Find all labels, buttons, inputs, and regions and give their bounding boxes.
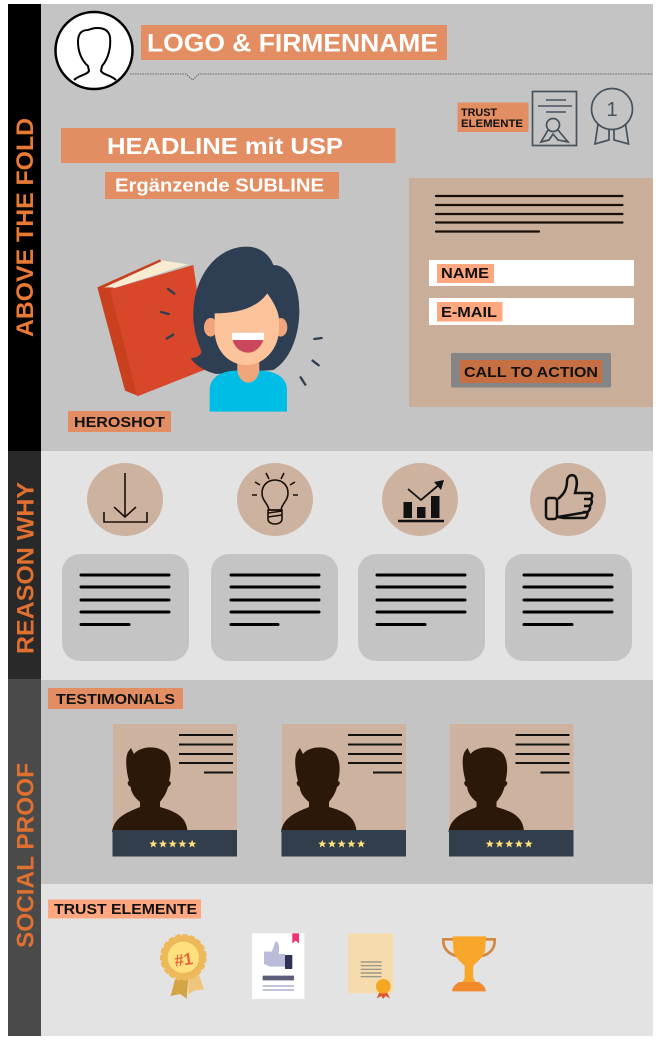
testimonial card two xyxy=(281,724,406,856)
icon: medal number one xyxy=(592,88,632,144)
panel: testimonials xyxy=(41,680,653,884)
face xyxy=(215,293,279,365)
book pages xyxy=(100,260,188,289)
neck xyxy=(237,360,259,383)
testimonial card one xyxy=(112,724,237,856)
panel: above the fold xyxy=(8,4,653,451)
input: name xyxy=(429,260,634,286)
icon: rosette number one xyxy=(161,935,205,999)
button: call to action: CALL TO ACTION xyxy=(464,364,598,381)
icon: trophy xyxy=(443,936,495,991)
sidebar: social proof: SOCIAL PROOF xyxy=(12,763,40,948)
button: call to action xyxy=(451,353,611,388)
card: reason four xyxy=(505,554,632,661)
label: heroshot xyxy=(68,411,171,432)
icon: medal number one: 1 xyxy=(606,99,618,121)
testimonial card three xyxy=(448,724,574,856)
sidebar: social proof xyxy=(8,679,41,1036)
form text lines xyxy=(436,196,622,232)
dotted header divider xyxy=(130,74,653,80)
label: trust elements: ELEMENTE xyxy=(461,118,523,130)
input: name: NAME xyxy=(441,265,489,282)
label: logo and company name: LOGO & FIRMENNAME xyxy=(147,30,438,58)
icon: growth chart xyxy=(382,463,458,536)
label: trust elements: TRUST xyxy=(461,107,497,119)
icon: thumbs up xyxy=(530,463,606,536)
sidebar: above the fold xyxy=(8,4,41,451)
label: trust elements xyxy=(458,102,528,132)
panel: lead form xyxy=(409,178,653,407)
input: e-mail: E-MAIL xyxy=(441,304,497,321)
subline xyxy=(105,172,339,199)
voice marks xyxy=(301,338,322,385)
sidebar: reason why xyxy=(8,451,41,679)
shirt xyxy=(210,371,287,412)
card: reason two xyxy=(211,554,338,661)
heroshot illustration: woman with book xyxy=(97,247,322,412)
label: testimonials xyxy=(48,688,183,709)
icon: rosette number one: #1 xyxy=(173,949,194,970)
headline xyxy=(61,128,396,163)
icon: certificate with seal xyxy=(348,933,393,999)
subline: Ergänzende SUBLINE xyxy=(115,176,324,196)
icon: certificate outline xyxy=(532,92,576,146)
input: e-mail xyxy=(429,298,634,325)
headline: HEADLINE mit USP xyxy=(107,133,343,159)
book cover xyxy=(110,265,208,396)
ears xyxy=(204,318,217,337)
book motion marks xyxy=(161,289,174,339)
panel: reason why xyxy=(8,451,653,680)
sidebar: reason why: REASON WHY xyxy=(12,482,40,654)
book spine xyxy=(97,287,137,396)
card: reason three xyxy=(358,554,485,661)
label: testimonials: TESTIMONIALS xyxy=(56,691,175,708)
icon: document with thumbs up xyxy=(252,933,304,999)
mouth xyxy=(232,333,264,353)
panel: trust elements xyxy=(41,884,653,1036)
label: heroshot: HEROSHOT xyxy=(74,414,165,431)
sidebar: above the fold: ABOVE THE FOLD xyxy=(12,118,39,337)
card: reason one xyxy=(62,554,189,661)
hair xyxy=(191,247,299,374)
icon: download xyxy=(87,463,163,536)
icon: logo avatar xyxy=(56,12,132,89)
label: trust elements: TRUST ELEMENTE xyxy=(54,901,197,918)
icon: light bulb xyxy=(237,463,313,536)
